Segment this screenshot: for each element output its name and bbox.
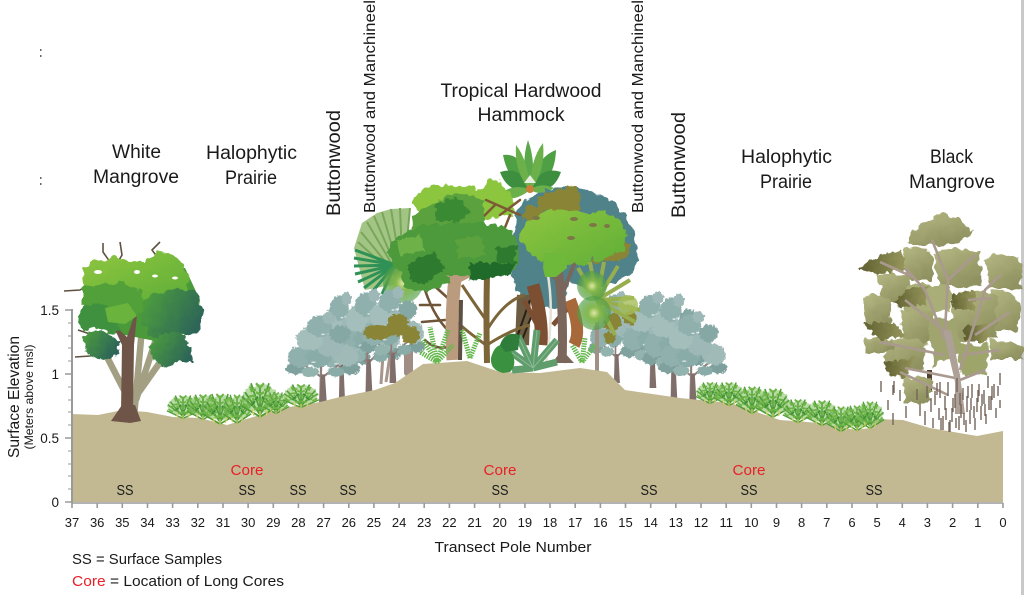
- x axis labels: 9: [773, 515, 780, 530]
- x axis labels: 25: [367, 515, 381, 530]
- heading: black mangrove: Mangrove: [909, 172, 995, 193]
- surface sample markers: SS: [238, 483, 256, 499]
- right edge strip: [1021, 0, 1024, 595]
- y axis labels: 1.5: [40, 303, 59, 318]
- x axis labels: 29: [266, 515, 281, 530]
- big pale trunks: [381, 345, 408, 384]
- x axis labels: 17: [568, 515, 582, 530]
- dead root trunk: [927, 370, 932, 391]
- heading: halophytic prairie left: Prairie: [225, 168, 277, 189]
- x axis labels: 30: [241, 515, 255, 530]
- x axis labels: 31: [216, 515, 230, 530]
- x axis labels: 36: [90, 515, 104, 530]
- right prairie shrubs: [696, 382, 884, 433]
- x axis labels: 35: [115, 515, 130, 530]
- surface sample markers: SS: [640, 483, 658, 499]
- mangrove pneumatophores: [881, 373, 1000, 432]
- dark canopy patches: [395, 197, 517, 284]
- heading: black mangrove: [909, 147, 995, 193]
- right fan palm: [577, 262, 640, 376]
- crown spots: [532, 216, 610, 240]
- x axis labels: 33: [165, 515, 180, 530]
- x axis labels: 2: [949, 515, 956, 530]
- x axis labels: 20: [492, 515, 507, 530]
- trunks and branches: [438, 262, 577, 363]
- teal back crown: [512, 187, 637, 310]
- canopy underlay: [85, 268, 200, 342]
- left prairie shrubs: [167, 383, 319, 426]
- left buttonwood stand: [286, 286, 425, 403]
- canopy gaps: [94, 270, 178, 280]
- x axis labels: 28: [291, 515, 306, 530]
- x axis labels: 0: [999, 515, 1007, 530]
- heading: tropical hardwood hammock: Tropical Hardwood: [440, 81, 602, 102]
- x axis: [72, 503, 1003, 508]
- branches: [880, 240, 1010, 395]
- centre crown: [105, 303, 137, 324]
- x axis labels: 8: [798, 515, 805, 530]
- x axis labels: 34: [140, 515, 155, 530]
- y axis labels: [40, 303, 59, 510]
- heading: halophytic prairie right: Halophytic: [741, 147, 832, 168]
- heading: white mangrove: [93, 142, 179, 188]
- left fan palm: [354, 208, 423, 303]
- dead branches: [64, 242, 160, 357]
- back branches: [420, 200, 520, 348]
- x axis labels: 26: [342, 515, 356, 530]
- heading: halophytic prairie right: Prairie: [760, 172, 812, 193]
- surface sample markers: SS: [740, 483, 758, 499]
- heading: tropical hardwood hammock: [440, 81, 602, 126]
- x axis labels: 16: [593, 515, 608, 530]
- x axis labels: 13: [669, 515, 683, 530]
- heading: white mangrove: White: [112, 142, 161, 163]
- x axis labels: 23: [417, 515, 431, 530]
- white mangrove trunk base: [111, 405, 141, 423]
- dark olive blobs: [860, 251, 988, 378]
- x axis title: Transect Pole Number: [434, 539, 592, 556]
- right buttonwood stand: [589, 291, 727, 402]
- light top crown: [82, 253, 189, 300]
- x axis labels: [65, 515, 1007, 530]
- surface sample markers: SS: [290, 483, 306, 499]
- olive canopy blobs: [863, 214, 1024, 402]
- y axis: [65, 309, 72, 503]
- white mangrove tree: [64, 242, 203, 422]
- x axis labels: 6: [848, 515, 856, 530]
- x axis labels: 3: [924, 515, 931, 530]
- x axis labels: 15: [618, 515, 633, 530]
- y axis labels: 0: [51, 495, 59, 510]
- lower right crown: [150, 332, 193, 369]
- heading: halophytic prairie left: Halophytic: [206, 143, 297, 164]
- main trunk: [112, 305, 141, 422]
- surface sample markers: SS: [492, 483, 508, 499]
- surface sample markers: [116, 483, 882, 499]
- stray marks: [40, 49, 42, 185]
- x axis labels: 24: [392, 515, 406, 530]
- x axis labels: 19: [518, 515, 532, 530]
- y axis title: Surface Elevation: [6, 336, 23, 458]
- heading: buttonwood right: Buttonwood: [669, 112, 690, 218]
- x axis labels: 21: [467, 515, 482, 530]
- heading: buttonwood left: Buttonwood: [324, 110, 345, 216]
- trunk branches: [107, 317, 163, 417]
- x axis labels: 12: [694, 515, 708, 530]
- x axis labels: 1: [974, 515, 981, 530]
- heading: buttonwood and manchineel right: Buttonwood and Manchineel: [630, 0, 647, 213]
- x axis labels: 18: [543, 515, 557, 530]
- ferns: [420, 327, 595, 373]
- surface sample markers: SS: [116, 483, 134, 499]
- left crown: [78, 302, 120, 333]
- heading: tropical hardwood hammock: Hammock: [478, 105, 565, 126]
- x axis labels: 11: [719, 515, 733, 530]
- lower left crown: [82, 330, 119, 360]
- ground profile: [72, 361, 1003, 502]
- olive foliage: [603, 311, 637, 344]
- mid crown: [82, 282, 145, 315]
- x axis labels: 37: [65, 515, 79, 530]
- y axis subtitle: (Meters above msl): [22, 344, 36, 450]
- light crown back: [413, 180, 514, 225]
- icon: top palm: [498, 140, 561, 199]
- legend: [72, 551, 284, 590]
- x axis labels: 27: [316, 515, 331, 530]
- core markers: Core: [484, 462, 516, 479]
- right light crown: [519, 209, 627, 266]
- x axis labels: 5: [873, 515, 881, 530]
- black mangrove tree: [860, 214, 1024, 414]
- bottom bush crown: [543, 253, 567, 277]
- main trunk: [943, 330, 965, 414]
- x axis labels: 10: [744, 515, 759, 530]
- legend: SS = Surface Samples: [72, 551, 222, 568]
- core markers: Core: [230, 462, 264, 479]
- x axis labels: 22: [442, 515, 457, 530]
- hammock vegetation: [354, 140, 637, 363]
- olive foliage: [364, 314, 420, 344]
- heading: halophytic prairie left: [206, 143, 297, 189]
- y axis labels: 1: [51, 367, 59, 382]
- legend: Core = Location of Long Cores: [72, 573, 284, 590]
- surface sample markers: SS: [340, 483, 356, 499]
- heading: black mangrove: Black: [930, 147, 973, 168]
- heading: buttonwood and manchineel left: Buttonwood and Manchineel: [362, 0, 379, 213]
- y axis labels: 0.5: [40, 431, 59, 446]
- heading: white mangrove: Mangrove: [93, 167, 179, 188]
- right dark crown: [143, 289, 203, 345]
- olive patches: [522, 188, 630, 262]
- core markers: Core: [732, 462, 766, 479]
- x axis labels: 14: [643, 515, 658, 530]
- surface sample markers: SS: [866, 483, 882, 499]
- x axis labels: 32: [191, 515, 205, 530]
- core markers: [230, 462, 766, 479]
- x axis labels: 7: [823, 515, 830, 530]
- dark-green main crown: [386, 193, 519, 292]
- x axis labels: 4: [899, 515, 906, 530]
- heading: halophytic prairie right: [741, 147, 832, 193]
